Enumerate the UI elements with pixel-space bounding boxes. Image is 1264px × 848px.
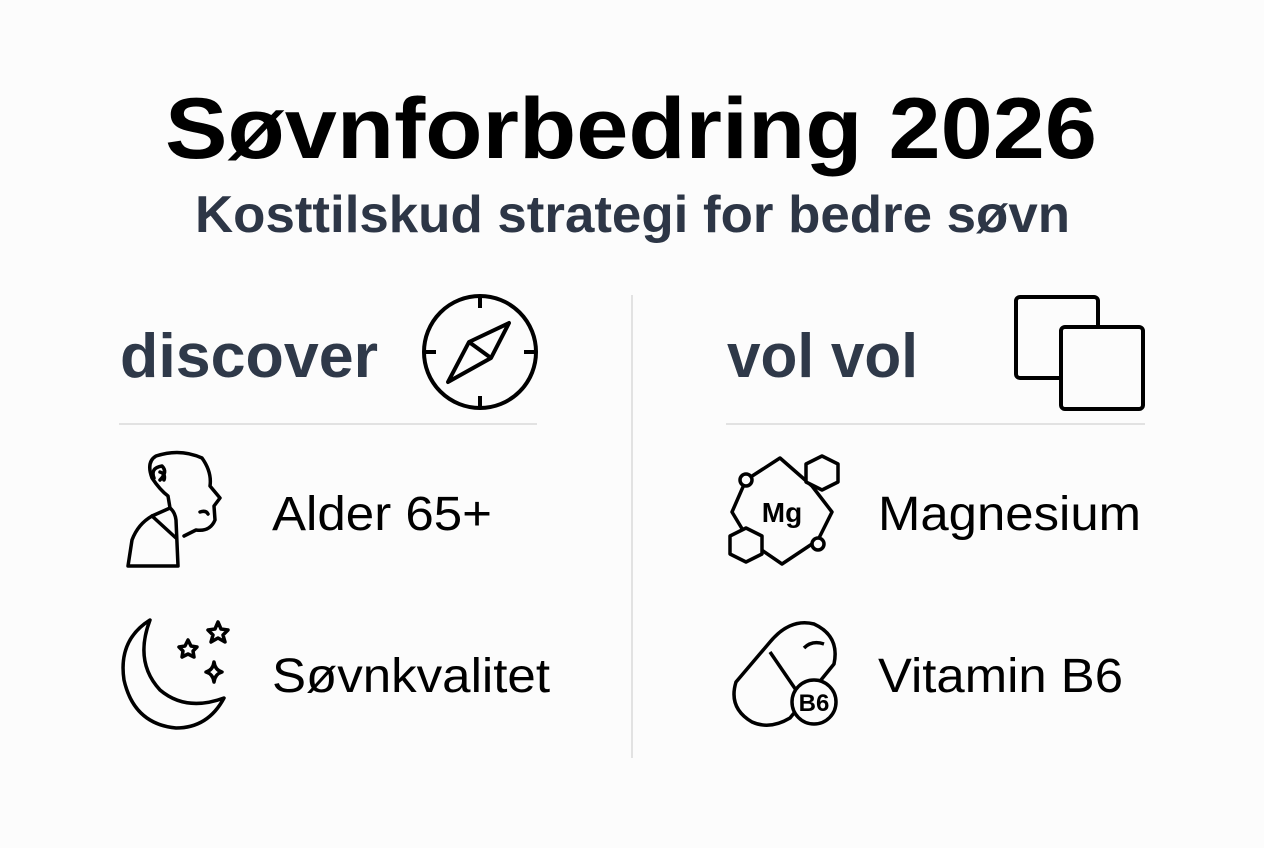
item: Alder 65+: Alder 65+ — [272, 488, 492, 541]
icon: pill B6 — [734, 623, 836, 725]
item: Vitamin B6 — [734, 623, 1123, 725]
item: Magnesium: Magnesium — [878, 488, 1141, 541]
panel: vol vol — [726, 297, 1145, 725]
item: Vitamin B6: Vitamin B6 — [878, 650, 1123, 703]
item: Søvnkvalitet — [123, 620, 550, 728]
title: Søvnforbedring 2026 — [165, 81, 1097, 177]
panel: discover — [119, 296, 550, 728]
icon: magnesium molecule: Mg — [762, 497, 802, 528]
item: Søvnkvalitet: Søvnkvalitet — [272, 650, 550, 703]
heading: discover: discover — [120, 322, 378, 391]
icon: pill B6: B6 — [799, 690, 829, 717]
item: Alder 65+ — [128, 452, 492, 566]
icon: moon and stars — [123, 620, 228, 728]
icon: two squares — [1016, 297, 1143, 409]
item: Magnesium — [730, 456, 1141, 564]
subtitle: Kosttilskud strategi for bedre søvn — [195, 186, 1070, 244]
icon: compass — [424, 296, 536, 408]
icon: magnesium molecule — [730, 456, 838, 564]
icon: head profile — [128, 452, 220, 566]
heading: vol vol: vol vol — [727, 322, 918, 391]
